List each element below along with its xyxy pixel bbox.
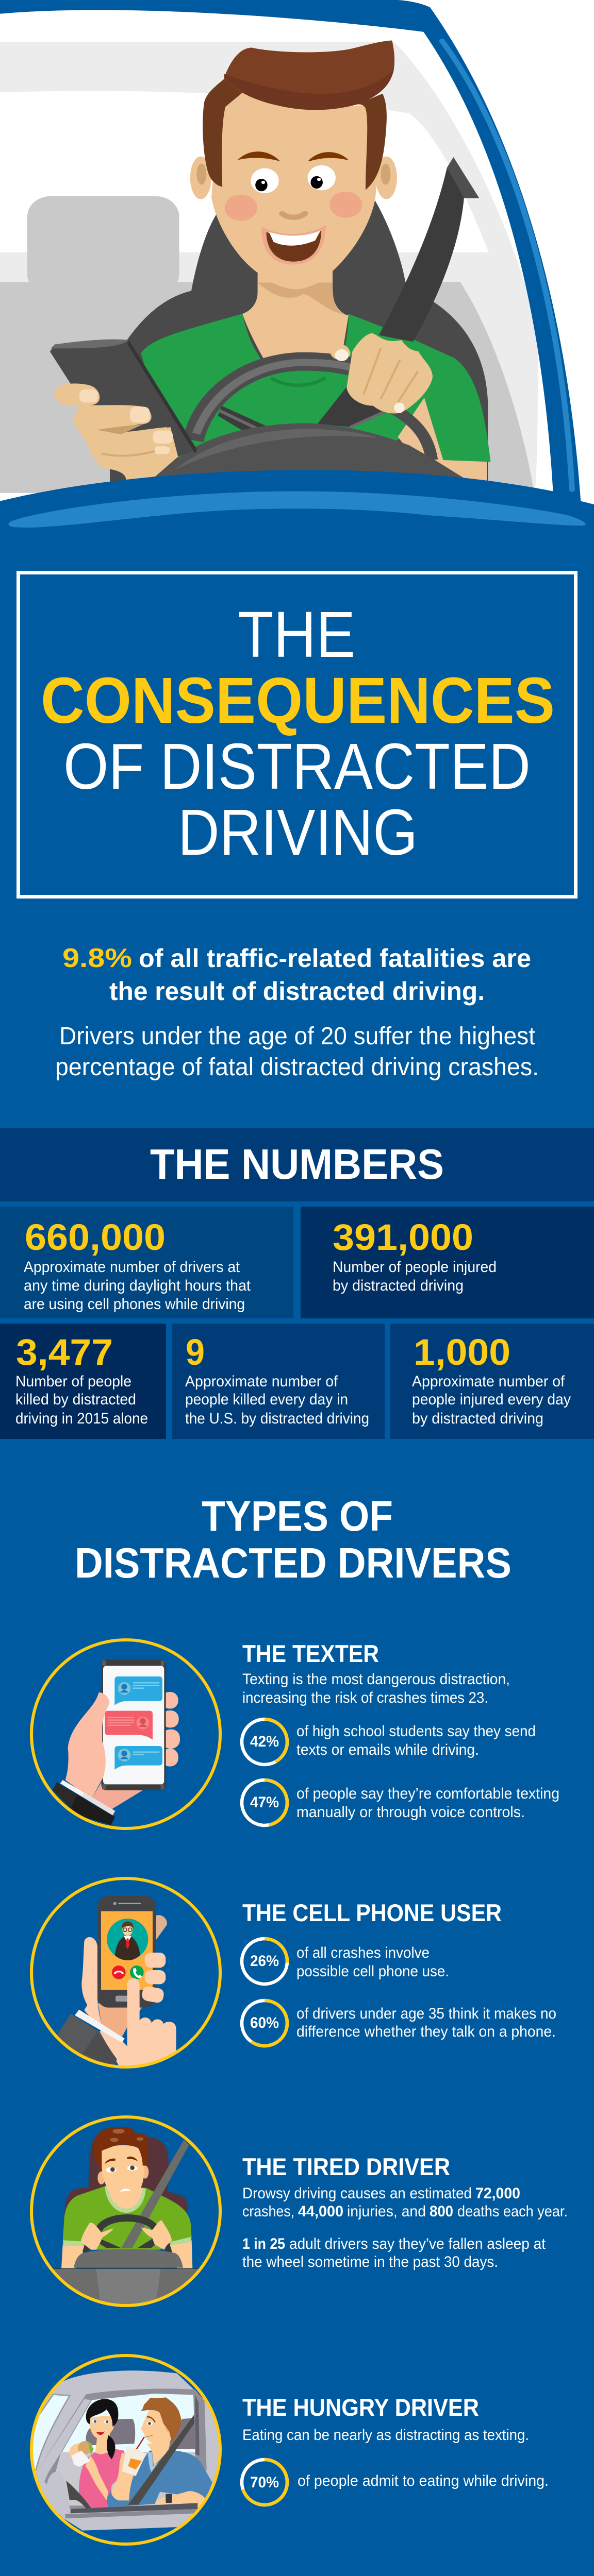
stat: 391,000: by distracted driving [333,1277,464,1294]
stat: 3,477: Number of people [15,1373,131,1390]
block: the hungry driver: THE HUNGRY DRIVER [242,2394,479,2421]
hair [203,79,242,187]
stat: 9 [172,1324,385,1439]
icon: couple eating in car [31,2370,223,2531]
block: the tired driver: 44,000 [298,2203,343,2220]
block: the cell phone user: possible cell phone use. [296,1963,449,1980]
stat: 3,477: killed by distracted [15,1391,136,1408]
seat [110,200,488,483]
block: the texter: THE TEXTER [242,1640,379,1667]
block: the texter: of high school students say they send [296,1723,536,1740]
block: the tired driver: crashes, [242,2203,294,2220]
icon: tired driver [54,2127,197,2308]
heading: types of distracted drivers: TYPES OF [202,1492,393,1540]
intro statement: of all traffic-related fatalities are [139,944,531,973]
donut: 70%: 70% [250,2474,279,2491]
face [211,92,381,289]
block: the cell phone user: THE CELL PHONE USER [242,1899,502,1926]
intro statement: percentage of fatal distracted driving crashes. [55,1054,539,1081]
section: the numbers [0,1128,594,1201]
icon: hand holding phone with text messages [53,1660,180,1825]
stat: 9: the U.S. by distracted driving [185,1410,369,1427]
block: the texter: increasing the risk of crashes times 23. [242,1689,488,1706]
block: the texter: Texting is the most dangerous distraction, [242,1671,510,1688]
block: the texter: texts or emails while driving. [296,1741,479,1758]
icon: hand holding phone with incoming call [58,1896,176,2067]
icon ring: tired driver [31,2117,220,2306]
intro statement: 9.8% [62,943,132,973]
stat: 1,000: by distracted driving [412,1410,543,1427]
donut: 42% [242,1719,287,1765]
block: the tired driver: Drowsy driving causes an estimated [242,2185,472,2202]
stat: 1,000 [390,1324,594,1439]
block: the tired driver: 800 [430,2203,453,2220]
heading: types of distracted drivers [75,1492,512,1587]
section: the numbers: THE NUMBERS [150,1140,444,1188]
block: the hungry driver: Eating can be nearly as distracting as texting. [242,2427,529,2444]
title: driving: DRIVING [178,796,418,869]
icon ring: texter [31,1640,220,1828]
block: the tired driver: injuries, and [347,2203,426,2220]
stat: 391,000: Number of people injured [333,1259,497,1276]
icon ring: cell phone user [31,1878,220,2067]
stat: 1,000: Approximate number of [412,1373,565,1390]
stat: 660,000 [0,1207,293,1318]
heading: types of distracted drivers: DISTRACTED DRIVERS [75,1539,512,1587]
car dashboard [0,470,594,546]
stat: 391,000: 391,000 [333,1217,473,1258]
title: of distracted: OF DISTRACTED [63,730,531,803]
block: the cell phone user: difference whether they talk on a phone. [296,2023,556,2040]
intro statement: the result of distracted driving. [109,977,485,1006]
intro statement [55,943,539,1081]
block: the cell phone user [242,1899,556,2046]
stat: 3,477: driving in 2015 alone [15,1410,148,1427]
stat: 660,000: are using cell phones while driving [24,1296,245,1313]
stat: 9: 9 [186,1332,205,1373]
stat: 1,000: 1,000 [414,1332,510,1373]
facial features [239,152,278,160]
title: consequences: CONSEQUENCES [41,664,555,737]
block: the texter: of people say they’re comfortable texting [296,1785,559,1802]
donut: 26% [242,1939,287,1984]
steering wheel spokes [318,384,394,427]
donut: 42%: 42% [250,1733,279,1750]
donut: 60% [242,2001,287,2046]
block: the hungry driver: of people admit to eating while driving. [298,2472,549,2489]
stat: 9: Approximate number of [185,1373,338,1390]
donut: 26%: 26% [250,1953,279,1970]
stat: 660,000: 660,000 [25,1217,166,1258]
block: the tired driver: adult drivers say they’ve fallen asleep at [289,2235,546,2252]
block: the texter [242,1640,559,1825]
steering wheel [193,362,351,440]
left hand holding phone [74,406,178,481]
donut: 60%: 60% [250,2014,279,2031]
block: the tired driver: the wheel sometime in the past 30 days. [242,2253,498,2270]
donut: 70% [242,2460,287,2505]
title: the: THE [238,598,355,671]
block: the tired driver: deaths each year. [457,2203,568,2220]
block: the tired driver: 1 in 25 [242,2235,285,2252]
ears [190,157,211,199]
block: the cell phone user: of drivers under age 35 think it makes no [296,2005,556,2022]
seatbelt [379,167,464,342]
stat: 660,000: Approximate number of drivers at [24,1259,240,1276]
block: the tired driver: 72,000 [475,2185,520,2202]
stat: 9: people killed every day in [185,1391,348,1408]
shirt [141,314,490,463]
block: the tired driver [242,2153,568,2270]
icon ring: hungry driver [31,2355,220,2544]
block: the cell phone user: of all crashes involve [296,1944,430,1961]
block: the hungry driver [242,2394,549,2505]
intro statement: Drivers under the age of 20 suffer the highest [59,1023,535,1050]
block: the tired driver: THE TIRED DRIVER [242,2153,450,2180]
block: the texter: manually or through voice controls. [296,1804,525,1821]
stat: 391,000 [301,1207,594,1318]
donut: 47%: 47% [250,1794,279,1811]
neck and chest [242,263,349,362]
right hand on wheel [329,344,351,360]
stat: 660,000: any time during daylight hours that [24,1277,251,1294]
dashboard pad [155,423,464,478]
title box [19,573,575,896]
stat: 3,477: 3,477 [16,1332,113,1373]
illustration: driver texting behind the wheel [0,0,594,546]
stat: 3,477 [0,1324,166,1439]
stat: 1,000: people injured every day [412,1391,571,1408]
phone [50,340,197,475]
donut: 47% [242,1780,287,1825]
